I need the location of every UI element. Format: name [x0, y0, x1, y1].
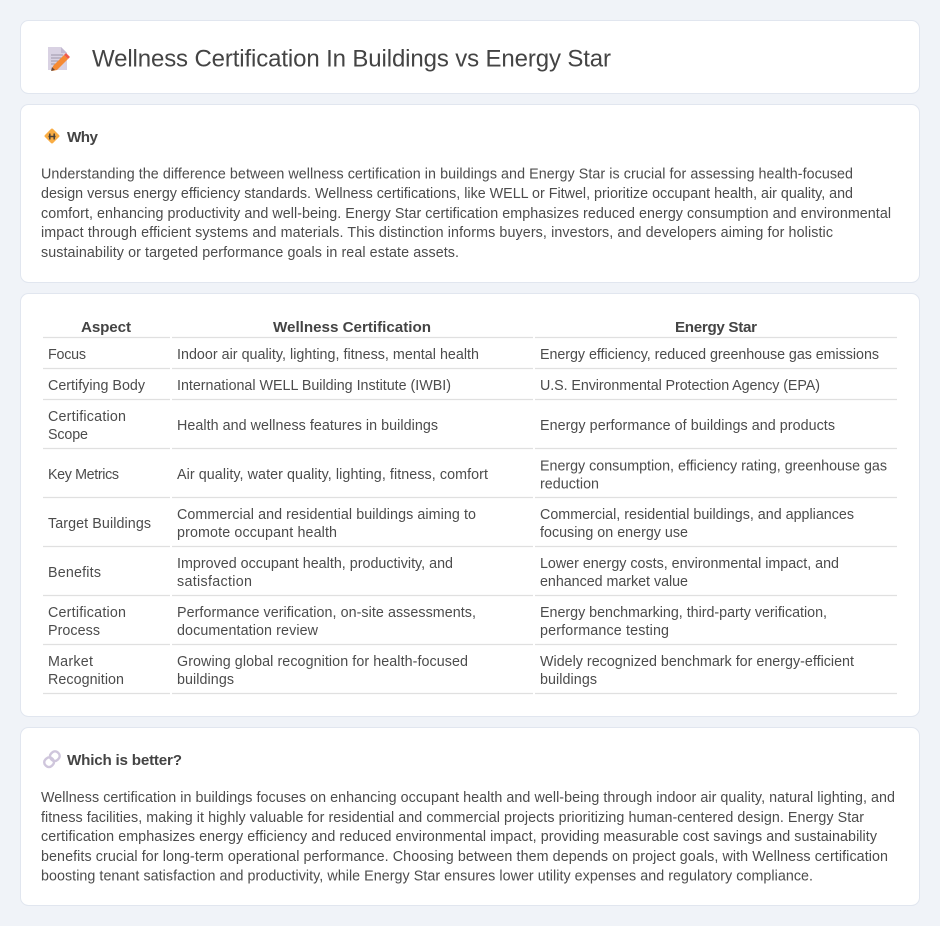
panel: header: [20, 20, 920, 94]
row: key metrics: [48, 458, 887, 492]
icon: link: [43, 750, 61, 769]
row: market recognition: Growing global recognition for health-focused: [177, 654, 468, 670]
text block: which is better: fitness facilities, making it highly valuable for residential and commercial projects prioritizing human-centered design. Energy Star: [41, 810, 864, 826]
text block: why: Understanding the difference between wellness certification in buildings and Energy Star is crucial for assessing health-focused: [41, 166, 853, 182]
text block: why: [41, 166, 891, 261]
row: certification scope: [48, 409, 835, 443]
row: focus: Energy efficiency, reduced greenhouse gas emissions: [540, 347, 879, 363]
row: target buildings: focusing on energy use: [540, 525, 688, 541]
row: certification scope: Energy performance of buildings and products: [540, 418, 835, 434]
row: benefits: satisfaction: [177, 574, 252, 590]
text block: which is better: certification emphasizes energy efficiency and reduced environmental impact, providing measurable cost savings and sustainability: [41, 829, 878, 845]
row: benefits: Lower energy costs, environmental impact, and: [540, 556, 839, 572]
text block: why: sustainability or targeted performance goals in real estate assets.: [41, 245, 459, 261]
text block: which is better: boosting tenant satisfaction and productivity, while Energy Star ensures lower utility expenses and regulatory compliance.: [41, 868, 813, 884]
table header row: Aspect: [81, 319, 131, 336]
row: key metrics: Energy consumption, efficiency rating, greenhouse gas: [540, 458, 887, 474]
row: certification scope: Scope: [48, 427, 88, 443]
row: market recognition: buildings: [540, 672, 597, 688]
row: market recognition: [48, 654, 854, 688]
row: certification process: Certification: [48, 605, 126, 621]
row: focus: Focus: [48, 347, 86, 363]
text block: why: design versus energy efficiency standards. Wellness certifications, like WELL or Fitwel, prioritize occupant health, air quality, and: [41, 186, 853, 202]
row: certification scope: Certification: [48, 409, 126, 425]
row: certification process: Energy benchmarking, third-party verification,: [540, 605, 827, 621]
table header row: Wellness Certification: [273, 319, 431, 336]
row: key metrics: reduction: [540, 476, 599, 492]
row: focus: Indoor air quality, lighting, fitness, mental health: [177, 347, 479, 363]
row: certifying body: Certifying Body: [48, 378, 146, 394]
row: certification scope: Health and wellness features in buildings: [177, 418, 438, 434]
table header row: [81, 319, 757, 336]
panel: which is better: [20, 728, 920, 906]
row: key metrics: Air quality, water quality, lighting, fitness, comfort: [177, 467, 488, 483]
row: market recognition: Widely recognized benchmark for energy-efficient: [540, 654, 854, 670]
row: market recognition: Market: [48, 654, 93, 670]
panel: why: [20, 104, 920, 282]
row: certifying body: International WELL Building Institute (IWBI): [177, 378, 451, 394]
row: certification process: [48, 605, 827, 639]
row: target buildings: promote occupant health: [177, 525, 337, 541]
row: market recognition: buildings: [177, 672, 234, 688]
row: target buildings: Commercial, residential buildings, and appliances: [540, 507, 854, 523]
heading: which is better: Which is better?: [67, 752, 182, 769]
icon: memo and pencil: [48, 47, 70, 71]
row: market recognition: Recognition: [48, 672, 124, 688]
icon: orange diamond: [44, 128, 60, 144]
text block: why: comfort, enhancing productivity and well-being. Energy Star certification emphasizes reduced energy consumption and environmental: [41, 206, 891, 222]
row: focus: [48, 347, 879, 363]
row: certifying body: [48, 378, 820, 394]
panel: comparison table: [20, 294, 920, 716]
row: target buildings: Target Buildings: [48, 516, 151, 532]
text block: why: impact through efficient systems and materials. This distinction informs buyers, investors, and developers aiming for holistic: [41, 225, 833, 241]
row: benefits: Improved occupant health, productivity, and: [177, 556, 453, 572]
row: benefits: enhanced market value: [540, 574, 688, 590]
row: benefits: [48, 556, 839, 590]
text block: which is better: [41, 790, 895, 884]
text block: which is better: benefits crucial for long-term operational performance. Choosing between them depends on project goals, with Wellness certification: [41, 849, 888, 865]
row: certification process: Performance verification, on-site assessments,: [177, 605, 476, 621]
row: benefits: Benefits: [48, 565, 101, 581]
row: certification process: performance testing: [540, 623, 669, 639]
row: certifying body: U.S. Environmental Protection Agency (EPA): [540, 378, 820, 394]
title: Wellness Certification In Buildings vs Energy Star: [92, 46, 611, 72]
row: target buildings: Commercial and residential buildings aiming to: [177, 507, 476, 523]
table header row: Energy Star: [675, 319, 757, 336]
row: target buildings: [48, 507, 854, 541]
row: certification process: Process: [48, 623, 100, 639]
heading: why: Why: [67, 129, 99, 146]
row: key metrics: Key Metrics: [48, 467, 119, 483]
row: certification process: documentation review: [177, 623, 319, 639]
text block: which is better: Wellness certification in buildings focuses on enhancing occupant health and well-being through indoor air quality, natural lighting, and: [41, 790, 895, 806]
